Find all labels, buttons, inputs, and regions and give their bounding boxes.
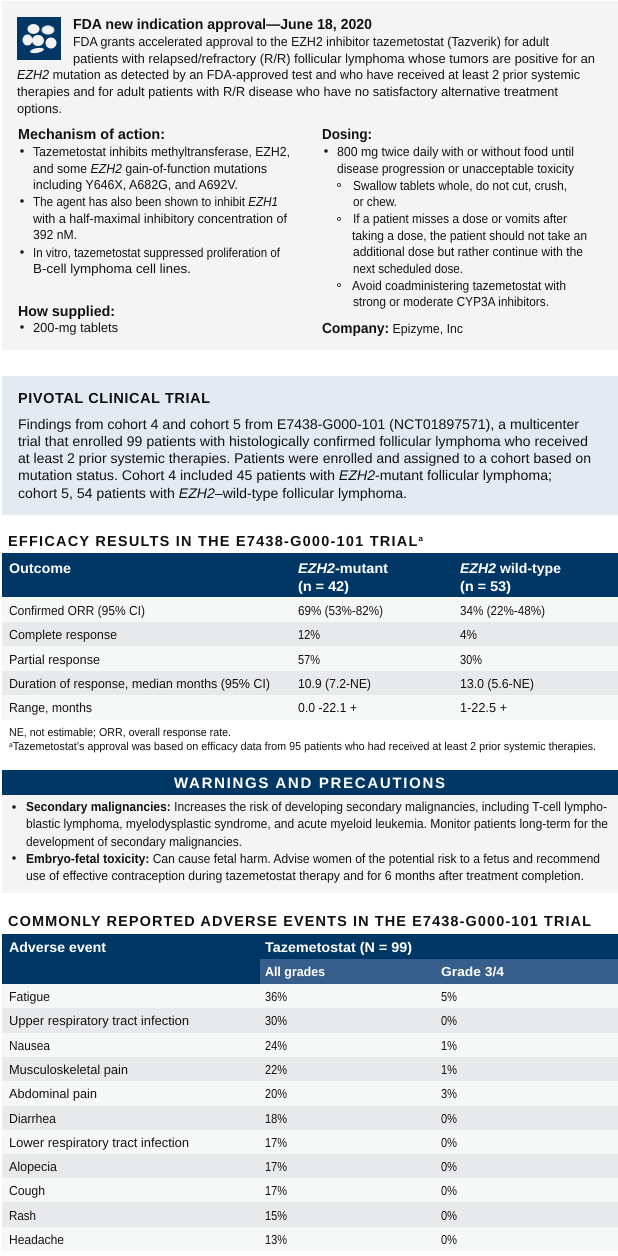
text block: mechanism of action: including Y646X, A682G, and A692V. [33, 177, 238, 192]
table: adverse events: All grades [265, 964, 325, 979]
text block: trial description: mutation status. Cohort 4 included 45 patients with EZH2-mutant follicular lymphoma; [18, 467, 552, 483]
heading: adverse events: COMMONLY REPORTED ADVERSE EVENTS IN THE E7438-G000-101 TRIAL [8, 914, 591, 930]
panel: FDA approval [2, 1, 618, 350]
text block: trial description: Findings from cohort 4 and cohort 5 from E7438-G000-101 (NCT01897571), a multicenter [18, 416, 579, 432]
text block: dosing: Avoid coadministering tazemetostat with [352, 278, 566, 293]
table: efficacy results: 10.9 (7.2-NE) [298, 676, 371, 691]
table: adverse events: 17% [265, 1183, 287, 1198]
banner: warnings heading [2, 770, 618, 795]
text block: dosing [322, 127, 587, 309]
table: adverse events: Cough [9, 1183, 45, 1198]
text block: dosing: additional dose but rather continue with the [353, 244, 583, 259]
text block: warnings: use of effective contraception during tazemetostat therapy and for 6 months after treatment completion. [26, 868, 584, 883]
text block: mechanism of action: 392 nM. [33, 227, 77, 242]
text block: trial description: at least 2 prior systemic therapies. Patients were enrolled and assigned to a cohort based on [18, 450, 591, 466]
table: adverse events: Abdominal pain [9, 1086, 97, 1101]
text block: indication: patients with relapsed/refractory (R/R) follicular lymphoma whose tumors are positive for an [73, 51, 595, 66]
table: efficacy results: Confirmed ORR (95% CI) [9, 603, 145, 618]
heading: efficacy results: a [419, 534, 424, 543]
text block: dosing: Dosing: [322, 127, 372, 143]
icon: cells [17, 17, 61, 60]
table: adverse events: 3% [441, 1086, 457, 1101]
text block: mechanism of action: The agent has also been shown to inhibit EZH1 [33, 194, 278, 209]
table: adverse events: 5% [441, 989, 457, 1004]
heading: efficacy results: EFFICACY RESULTS IN THE E7438-G000-101 TRIAL [8, 534, 417, 550]
table: efficacy results: (n = 53) [460, 578, 511, 594]
table: adverse events [2, 934, 618, 1251]
table: efficacy results: Duration of response, median months (95% CI) [9, 676, 270, 691]
table: efficacy results: Complete response [9, 627, 117, 642]
table: adverse events: Fatigue [9, 989, 50, 1004]
table: adverse events: 36% [265, 989, 287, 1004]
panel: warnings and precautions [2, 770, 618, 893]
text block: trial description: trial that enrolled 99 patients with histologically confirmed follicular lymphoma who received [18, 433, 588, 449]
table: adverse events: 1% [441, 1062, 457, 1077]
text block: indication: options. [17, 101, 62, 116]
table: efficacy results: EZH2 wild-type [460, 560, 561, 576]
table: adverse events: Diarrhea [9, 1111, 57, 1126]
table: efficacy results: 4% [460, 627, 477, 642]
table: adverse events: 0% [441, 1208, 457, 1223]
text block: dosing: disease progression or unacceptable toxicity [337, 161, 574, 176]
table: adverse events: 17% [265, 1159, 287, 1174]
text block: dosing: 800 mg twice daily with or without food until [337, 144, 574, 159]
banner: warnings heading: WARNINGS AND PRECAUTIONS [174, 775, 445, 792]
table: adverse events: 20% [265, 1086, 287, 1101]
table: efficacy results: 1-22.5 + [460, 700, 507, 715]
table: adverse events: 0% [441, 1232, 457, 1247]
table: adverse events: 0% [441, 1135, 457, 1150]
footnote: Tazemetostat’s approval was based on efficacy data from 95 patients who had received at least 2 prior systemic therapies. [13, 741, 596, 753]
table: adverse events: Headache [9, 1232, 64, 1247]
heading: pivotal clinical trial: PIVOTAL CLINICAL TRIAL [18, 391, 210, 407]
table: adverse events: 24% [265, 1038, 287, 1053]
table: adverse events: 0% [441, 1111, 457, 1126]
table: efficacy results: 0.0 -22.1 + [298, 700, 357, 715]
text block: mechanism of action: Tazemetostat inhibits methyltransferase, EZH2, [33, 144, 290, 159]
footnote: a [9, 742, 13, 749]
table: adverse events: Rash [9, 1208, 36, 1223]
text block: indication: EZH2 mutation as detected by an FDA-approved test and who have received at least 2 prior systemic [17, 67, 580, 82]
text block: how supplied [18, 304, 118, 335]
table: adverse events: 0% [441, 1183, 457, 1198]
table: efficacy results: 30% [460, 652, 482, 667]
panel: pivotal clinical trial [2, 376, 618, 515]
text block: mechanism of action: In vitro, tazemetostat suppressed proliferation of [33, 245, 280, 260]
text block: trial description [18, 416, 591, 501]
table: efficacy results: Outcome [9, 560, 71, 576]
text block: dosing: strong or moderate CYP3A inhibitors. [353, 294, 549, 309]
table: adverse events: Lower respiratory tract infection [9, 1135, 189, 1150]
text block: indication: FDA grants accelerated approval to the EZH2 inhibitor tazemetostat (Tazverik) for adult [73, 34, 549, 49]
table: adverse events: Upper respiratory tract infection [9, 1013, 189, 1028]
table: efficacy results: 12% [298, 627, 320, 642]
text block: trial description: cohort 5, 54 patients with EZH2–wild-type follicular lymphoma. [18, 485, 407, 501]
table: adverse events: 0% [441, 1159, 457, 1174]
text block: dosing: taking a dose, the patient should not take an [352, 228, 587, 243]
table: adverse events: 1% [441, 1038, 457, 1053]
table: adverse events: Tazemetostat (N = 99) [265, 939, 412, 955]
text block: indication: therapies and for adult patients with R/R disease who have no satisfactory alternative treatment [17, 84, 558, 99]
text block: how supplied: How supplied: [18, 304, 115, 320]
table: adverse events: Alopecia [9, 1159, 58, 1174]
text block: indication [17, 34, 595, 116]
text block: dosing: If a patient misses a dose or vomits after [353, 211, 568, 226]
text block: warnings: development of secondary malignancies. [26, 834, 242, 849]
table: efficacy results: 34% (22%-48%) [460, 603, 545, 618]
text block: dosing: Swallow tablets whole, do not cut, crush, [353, 178, 567, 193]
table: efficacy results: 69% (53%-82%) [298, 603, 383, 618]
footnote: NE, not estimable; ORR, overall response rate. [9, 727, 231, 739]
footnote [9, 727, 596, 753]
text block: mechanism of action: Mechanism of action: [18, 127, 165, 143]
table: adverse events: Nausea [9, 1038, 51, 1053]
table: efficacy results: Range, months [9, 700, 92, 715]
table: adverse events: 18% [265, 1111, 287, 1126]
text block: how supplied: 200-mg tablets [33, 320, 118, 335]
text block: dosing: or chew. [353, 194, 397, 209]
text block: mechanism of action: B-cell lymphoma cell lines. [33, 261, 191, 276]
text block: warnings: Embryo-fetal toxicity: Can cause fetal harm. Advise women of the potential risk to a fetus and recommend [26, 851, 600, 866]
table: adverse events: 30% [265, 1013, 287, 1028]
heading: FDA approval: FDA new indication approval—June 18, 2020 [73, 17, 372, 33]
table: adverse events: Musculoskeletal pain [9, 1062, 128, 1077]
text block: mechanism of action: with a half-maximal inhibitory concentration of [32, 211, 287, 226]
table: adverse events: 0% [441, 1013, 457, 1028]
table: efficacy results: 13.0 (5.6-NE) [460, 676, 534, 691]
table: adverse events: Grade 3/4 [441, 964, 505, 979]
text block: warnings [12, 799, 608, 883]
text block: mechanism of action [18, 127, 290, 276]
table: efficacy results: (n = 42) [298, 578, 349, 594]
table: adverse events: 22% [265, 1062, 287, 1077]
text block: company: Company: Epizyme, Inc [322, 321, 463, 337]
table: adverse events: 13% [265, 1232, 287, 1247]
table: efficacy results: Partial response [9, 652, 100, 667]
table: efficacy results: 57% [298, 652, 320, 667]
table: efficacy results [2, 553, 618, 720]
table: adverse events: 15% [265, 1208, 287, 1223]
table: adverse events: 17% [265, 1135, 287, 1150]
table: efficacy results: EZH2-mutant [298, 560, 388, 576]
text block: dosing: next scheduled dose. [353, 261, 463, 276]
text block: mechanism of action: and some EZH2 gain-of-function mutations [33, 161, 267, 176]
table: adverse events: Adverse event [9, 939, 106, 955]
